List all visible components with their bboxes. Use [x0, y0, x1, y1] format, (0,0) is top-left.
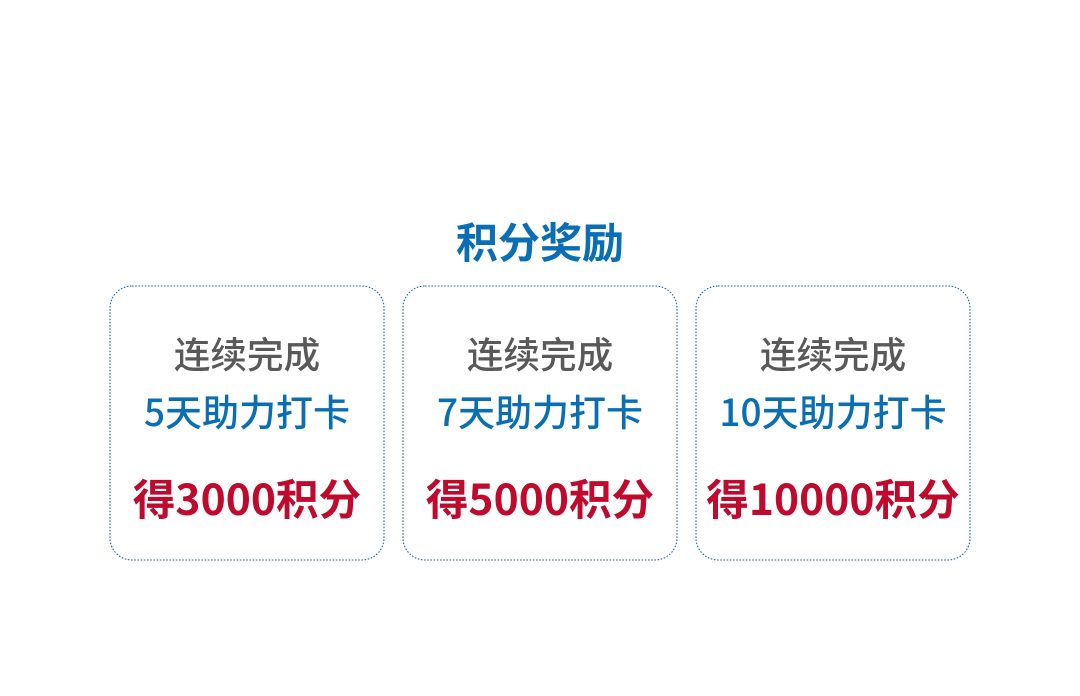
points reward: 得3000积分: [133, 467, 361, 528]
condition label: 连续完成: [760, 326, 906, 379]
points reward: 得5000积分: [426, 467, 654, 528]
panel: 10 days reward: [695, 286, 971, 560]
condition label: 连续完成: [174, 326, 320, 379]
panel: 5 days reward: [109, 286, 385, 560]
condition label: 连续完成: [467, 326, 613, 379]
days requirement: 5天助力打卡: [144, 383, 350, 437]
points reward: 得10000积分: [706, 467, 960, 528]
days requirement: 10天助力打卡: [719, 383, 947, 437]
title: 积分奖励: [456, 210, 624, 271]
days requirement: 7天助力打卡: [437, 383, 643, 437]
panel: 7 days reward: [402, 286, 678, 560]
